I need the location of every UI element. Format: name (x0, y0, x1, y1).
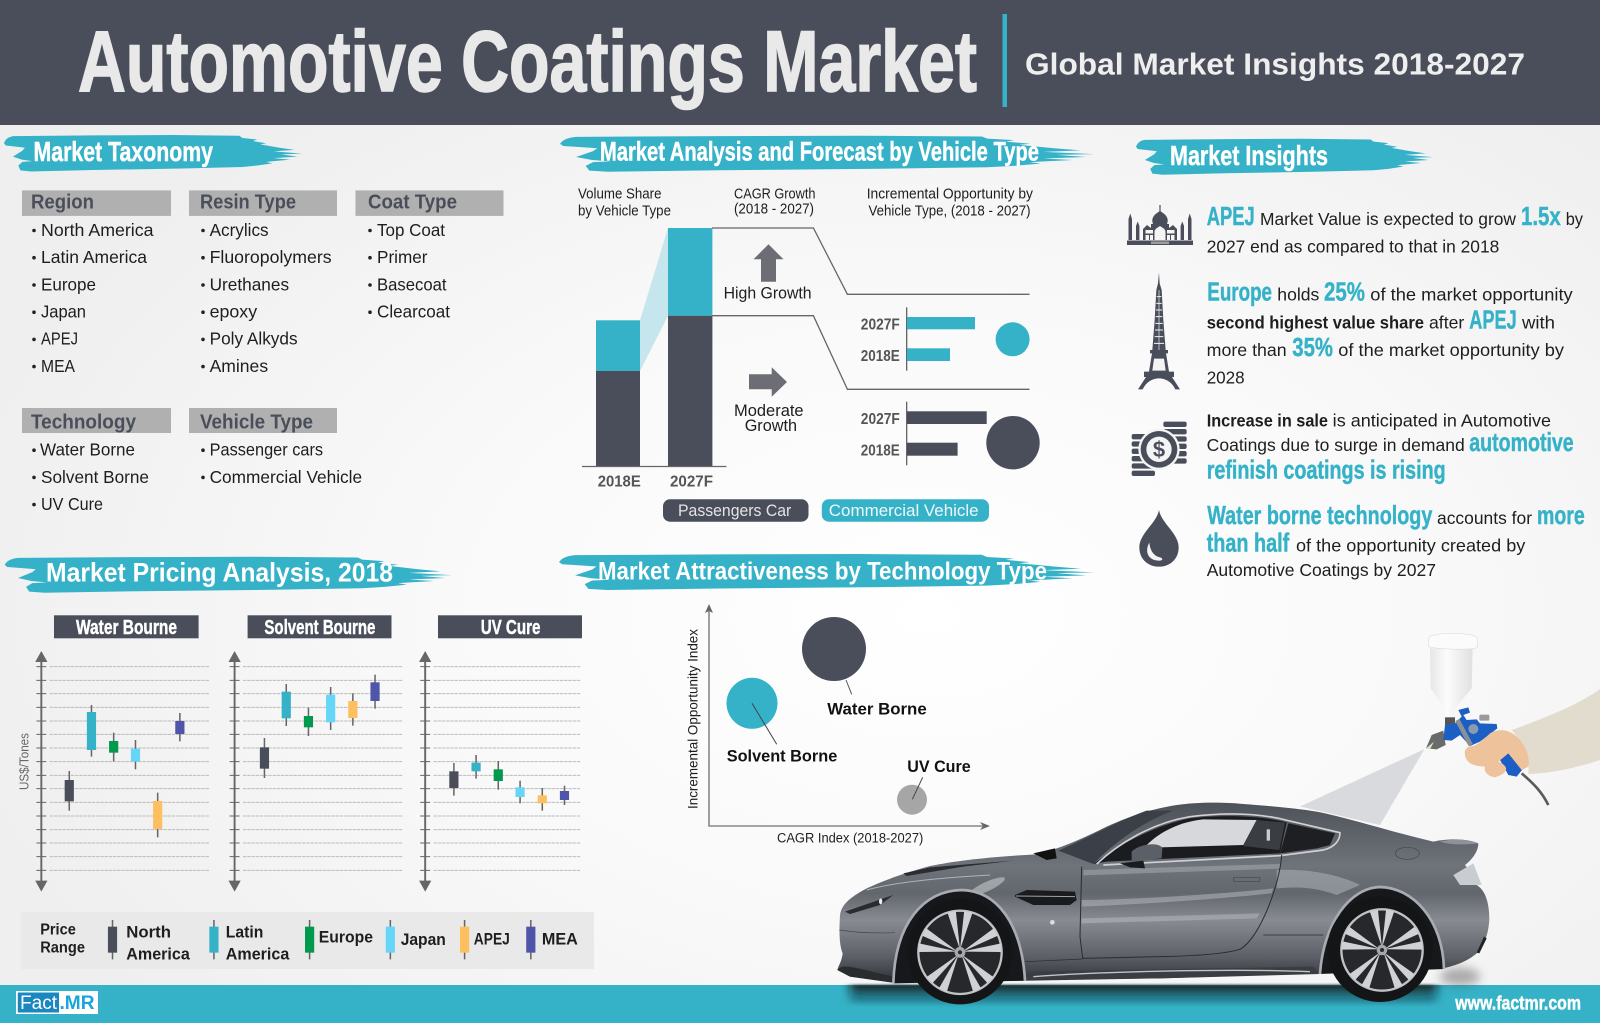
bubble: uv cure: UV Cure (907, 757, 971, 776)
bubble: water borne (802, 617, 927, 718)
list: vehicle type: Commercial Vehicle (210, 467, 362, 487)
insight text: apej growth (1207, 201, 1583, 257)
list: technology: UV Cure (41, 494, 103, 514)
label: high growth: High Growth (724, 284, 812, 302)
logo: fact.mr: Fact (20, 993, 58, 1014)
candlestick chart: water bourne (35, 651, 210, 892)
heading: market insights (1136, 139, 1433, 175)
insight text: europe share: of the market opportunity by (1338, 340, 1564, 360)
rear reflector (1477, 937, 1487, 953)
stacked bar chart: volume share: 2027F (670, 474, 713, 491)
car body (837, 803, 1489, 983)
list: resin type: Acrylics (210, 220, 269, 240)
hose (1522, 773, 1548, 805)
bar chart: passengers car opportunity (861, 402, 1040, 469)
car (837, 803, 1489, 1007)
hand (1465, 730, 1529, 777)
column label: volume share: by Vehicle Type (578, 204, 671, 220)
subtitle: Global Market Insights 2018-2027 (1025, 46, 1525, 82)
insight text: increase in sale: Increase in sale (1207, 410, 1328, 430)
panel: market taxonomy (4, 135, 504, 514)
wing mirror (1120, 844, 1162, 868)
label: solvent bourne: Solvent Bourne (264, 617, 375, 639)
insight text: increase in sale: refinish coatings is rising (1207, 454, 1446, 484)
legend labels: Latin (226, 923, 263, 941)
y axis label: Incremental Opportunity Index (686, 629, 701, 809)
label: water bourne: Water Bourne (76, 617, 177, 639)
spray gun in hand (1426, 633, 1600, 805)
candlestick chart: uv cure (419, 651, 581, 892)
axis label: us$/tones: US$/Tones (18, 733, 32, 790)
insight text: europe share: second highest value share (1207, 312, 1424, 332)
heading: market taxonomy (4, 135, 302, 172)
list: resin type: Amines (210, 356, 268, 376)
panel: market pricing analysis (5, 557, 594, 969)
list: technology (22, 408, 171, 514)
label: moderate growth: Moderate (734, 402, 804, 420)
list: vehicle type (189, 408, 362, 487)
list: region: APEJ (41, 329, 78, 349)
bar chart: passengers car opportunity: 2018E (861, 443, 900, 460)
list: coat type: Primer (377, 247, 428, 267)
heading: market attractiveness: Market Attractiveness by Technology Type (598, 557, 1047, 585)
column label: volume share (578, 187, 671, 220)
column label: volume share: Volume Share (578, 187, 662, 203)
bubble: solvent borne: Solvent Borne (727, 747, 837, 766)
legend labels: America (226, 945, 290, 963)
spoiler highlight (1440, 840, 1478, 844)
legend labels: America (126, 945, 191, 963)
list: region (22, 190, 171, 376)
insight text: water borne technology: accounts for (1437, 508, 1532, 528)
list: coat type: Coat Type (368, 191, 457, 213)
logo: fact.mr (16, 991, 98, 1014)
heading: market taxonomy: Market Taxonomy (34, 136, 214, 167)
column label: incremental opportunity: Incremental Opportunity by (867, 187, 1034, 203)
bar chart: passengers car opportunity: 2027F (861, 411, 900, 428)
icon: eiffel tower (1138, 273, 1180, 389)
gun body (1426, 707, 1523, 777)
list: region: Latin America (41, 247, 147, 267)
insight text: europe share: of the market opportunity (1370, 285, 1573, 305)
insight text: apej growth: 1.5x (1521, 201, 1561, 231)
insight text: europe share: APEJ (1469, 304, 1517, 334)
legend labels: APEJ (474, 930, 510, 948)
rear wheel (1327, 897, 1433, 1002)
legend: commercial vehicle: Commercial Vehicle (829, 502, 979, 520)
icon: coins (1132, 422, 1187, 476)
body highlights (839, 864, 1360, 933)
list: coat type (356, 190, 504, 322)
insight text: apej growth: by (1566, 209, 1583, 229)
legend title: Price (40, 921, 76, 938)
title: Automotive Coatings Market (78, 14, 977, 110)
label: uv cure: UV Cure (481, 617, 540, 639)
insight text: europe share: 2028 (1207, 367, 1245, 387)
insight text: europe share: Europe (1207, 277, 1272, 307)
list: resin type: Resin Type (200, 191, 296, 213)
list: vehicle type: Passenger cars (210, 440, 323, 460)
label: moderate growth (734, 402, 804, 435)
column label: cagr growth: CAGR Growth (734, 187, 816, 203)
column label: cagr growth: (2018 - 2027) (734, 202, 814, 218)
heading: market insights: Market Insights (1170, 140, 1328, 171)
legend title (40, 921, 85, 957)
x axis label: CAGR Index (2018-2027) (777, 831, 923, 846)
legend swatches (108, 920, 535, 959)
paint spray cone (1300, 749, 1424, 825)
insight text: apej growth: 2027 end as compared to that in 2018 (1207, 237, 1499, 257)
insight text: water borne technology: of the opportunity created by (1296, 535, 1526, 555)
list: region: MEA (41, 356, 75, 376)
hood vent (903, 861, 1013, 876)
tail light (1453, 863, 1482, 885)
heading: market analysis (560, 136, 1094, 172)
bubble chart axes (705, 604, 990, 830)
list: coat type: Top Coat (377, 220, 445, 240)
list: region: Europe (41, 274, 96, 294)
insight text: water borne technology: than half (1207, 527, 1290, 557)
panel: market attractiveness (559, 554, 1094, 846)
list: technology: Water Borne (40, 440, 135, 460)
list: resin type: Poly Alkyds (210, 329, 298, 349)
legend labels: North (126, 923, 171, 941)
footer bar (0, 985, 1600, 1023)
insight text: europe share: 25% (1324, 277, 1365, 307)
insight text: water borne technology: Automotive Coatings by 2027 (1207, 560, 1436, 580)
insight text: europe share: with (1521, 312, 1555, 332)
panel: market insights (1127, 139, 1585, 580)
list: coat type: Clearcoat (377, 302, 450, 322)
list: region: North America (41, 220, 154, 240)
label: uv cure (438, 615, 582, 639)
bar chart: commercial vehicle opportunity (861, 307, 1030, 371)
panel: market analysis and forecast (560, 136, 1094, 522)
heading: market pricing analysis: Market Pricing Analysis, 2018 (46, 558, 393, 588)
stacked bar chart: volume share: 2018E (598, 474, 641, 491)
column label: incremental opportunity (867, 187, 1034, 220)
icon: water drop (1139, 510, 1179, 567)
heading: market analysis: Market Analysis and Forecast by Vehicle Type (600, 137, 1039, 167)
icon: coins: $ (1153, 437, 1165, 462)
wiper (1033, 848, 1057, 860)
insight text: europe share: 35% (1292, 332, 1333, 362)
candlestick chart: solvent bourne (228, 651, 403, 892)
legend labels: MEA (542, 930, 578, 948)
insight text: increase in sale: is anticipated in Automotive (1333, 410, 1551, 430)
side windows (1093, 814, 1340, 865)
insight text: water borne technology (1207, 500, 1585, 580)
arrow: moderate growth (749, 367, 787, 397)
side repeater (1050, 920, 1055, 925)
list: resin type: Urethanes (210, 274, 289, 294)
list: resin type (189, 190, 337, 376)
list: technology: Technology (31, 412, 137, 434)
header banner (0, 0, 1600, 125)
windshield (1058, 811, 1173, 864)
headlight (845, 895, 893, 914)
insight text: apej growth: APEJ (1207, 201, 1255, 231)
legend: price range (21, 912, 594, 969)
bubble: uv cure (897, 757, 971, 815)
car shadow (850, 967, 1480, 1007)
sleeve (1512, 689, 1600, 774)
insight text: europe share (1207, 277, 1573, 387)
insight text: europe share: more than (1207, 340, 1287, 360)
paint cup (1428, 633, 1477, 725)
illustration: spray gun and car (837, 633, 1600, 1007)
stacked bar chart: volume share (582, 228, 726, 491)
front wheel (907, 899, 1013, 1004)
list: region: Japan (41, 302, 86, 322)
label: moderate growth: Growth (745, 417, 797, 435)
insight text: europe share: after (1429, 312, 1464, 332)
legend: passengers car (663, 499, 808, 522)
bubble: water borne: Water Borne (827, 699, 927, 718)
fuel cap (1395, 847, 1419, 859)
bar chart: commercial vehicle opportunity: 2018E (861, 348, 900, 365)
list: coat type: Basecoat (377, 274, 447, 294)
side vent (1015, 890, 1077, 905)
legend labels: Japan (401, 931, 446, 949)
side sill (1025, 967, 1320, 980)
legend labels: Europe (319, 929, 373, 947)
legend labels (126, 923, 578, 963)
list: vehicle type: Vehicle Type (200, 412, 313, 434)
bubble: solvent borne (726, 678, 837, 766)
arrow: high growth (754, 244, 784, 282)
list: region: Region (31, 191, 94, 213)
insight text: increase in sale: Coatings due to surge in demand (1207, 435, 1465, 455)
list: resin type: Fluoropolymers (210, 247, 332, 267)
insight text: apej growth: Market Value is expected to grow (1260, 209, 1516, 229)
logo: fact.mr: .MR (60, 993, 95, 1014)
front bumper lip (837, 967, 893, 983)
insight text: increase in sale (1207, 410, 1574, 484)
door lines and handle (1025, 855, 1323, 962)
list: resin type: epoxy (210, 302, 257, 322)
insight text: europe share: holds (1277, 285, 1320, 305)
connector lines (712, 228, 1030, 389)
subtitle divider (1002, 14, 1007, 107)
legend: passengers car: Passengers Car (678, 502, 792, 520)
list: technology: Solvent Borne (41, 467, 149, 487)
column label: incremental opportunity: Vehicle Type, (2018 - 2027) (868, 204, 1030, 220)
column label: cagr growth (734, 187, 816, 218)
bar chart: commercial vehicle opportunity: 2027F (861, 316, 900, 333)
legend title: Range (40, 940, 85, 957)
insight text: water borne technology: Water borne technology (1207, 500, 1433, 530)
insight text: water borne technology: more (1537, 500, 1585, 530)
wheel arches (893, 887, 1444, 983)
icon: taj mahal (1127, 205, 1193, 245)
